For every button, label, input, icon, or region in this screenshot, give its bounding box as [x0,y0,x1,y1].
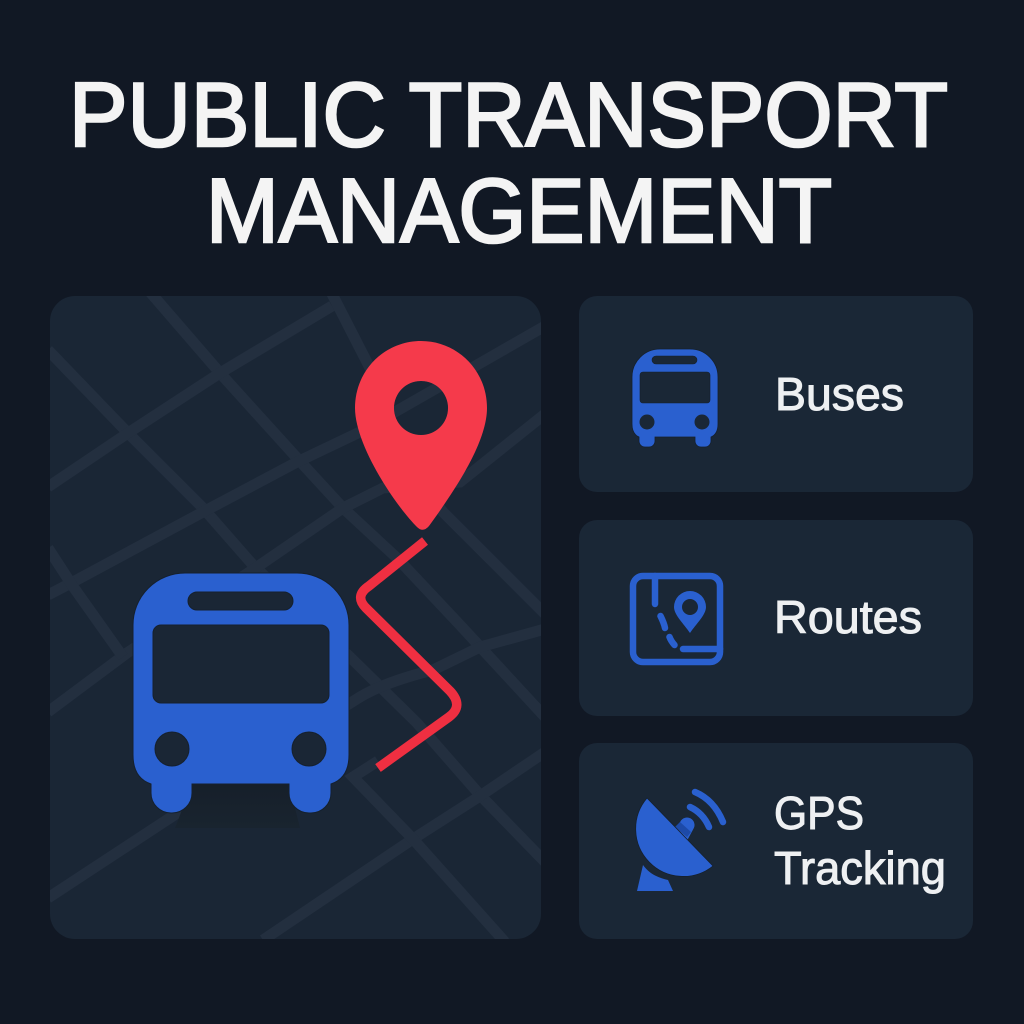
title [69,65,948,262]
title: MANAGEMENT [206,161,832,262]
icon: large bus [133,573,349,813]
label: gps tracking [774,787,946,894]
panel: routes [579,520,973,716]
bus shadow [175,784,300,828]
icon: satellite dish [636,792,723,891]
route line [361,541,457,768]
icon: route map [633,576,720,662]
panel: map [48,290,545,942]
panel: buses [579,296,973,492]
icon: small bus [632,349,718,447]
label: gps tracking: GPS [774,787,864,839]
label: gps tracking: Tracking [774,842,946,894]
label: buses: Buses [775,368,904,420]
panel: gps tracking [579,743,973,939]
icon: location pin [355,341,487,530]
title: PUBLIC TRANSPORT [69,65,948,166]
label: routes: Routes [774,591,922,643]
